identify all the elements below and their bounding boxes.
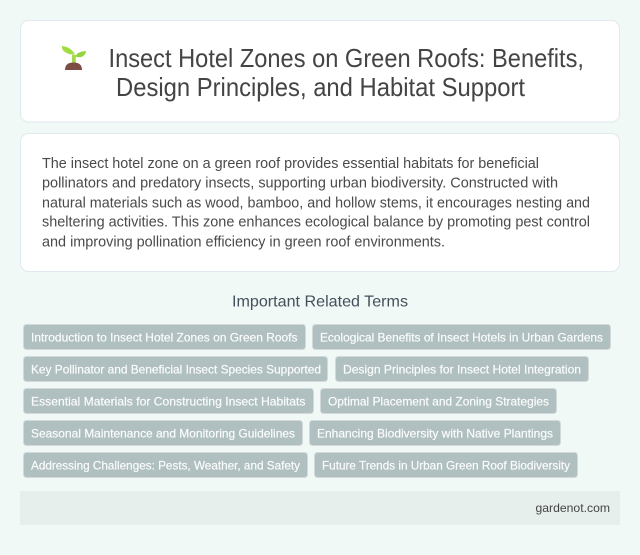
tag: ecological benefits: Ecological Benefits of Insect Hotels in Urban Gardens xyxy=(320,330,603,344)
tag: essential materials xyxy=(24,388,314,414)
title: Insect Hotel Zones on Green Roofs: Benefits, xyxy=(108,45,584,73)
icon: seedling xyxy=(62,46,86,70)
tag: key pollinators: Key Pollinator and Beneficial Insect Species Supported xyxy=(31,362,321,376)
tag: optimal placement: Optimal Placement and Zoning Strategies xyxy=(328,394,549,408)
tag: addressing challenges xyxy=(24,452,308,478)
tag: future trends xyxy=(314,452,578,478)
panel: related term tags xyxy=(24,324,610,478)
description text: and improving pollination efficiency in green roof environments. xyxy=(42,234,445,250)
tag: enhancing biodiversity xyxy=(310,420,560,446)
description text: The insect hotel zone on a green roof provides essential habitats for beneficial xyxy=(42,156,539,172)
tag: future trends: Future Trends in Urban Green Roof Biodiversity xyxy=(322,458,570,472)
tag: optimal placement xyxy=(320,388,556,414)
footer source text: gardenot.com xyxy=(536,501,610,515)
description text: natural materials such as wood, bamboo, and hollow stems, it encourages nesting and xyxy=(42,196,590,212)
description text xyxy=(42,156,590,250)
tag: seasonal maintenance: Seasonal Maintenance and Monitoring Guidelines xyxy=(31,426,295,440)
tag: design principles: Design Principles for Insect Hotel Integration xyxy=(343,362,581,376)
title: Design Principles, and Habitat Support xyxy=(116,74,525,102)
tag: introduction xyxy=(24,324,306,350)
tag: seasonal maintenance xyxy=(24,420,302,446)
tag: addressing challenges: Addressing Challenges: Pests, Weather, and Safety xyxy=(31,458,300,472)
panel: title card xyxy=(20,20,620,122)
panel: description card xyxy=(20,134,620,272)
tag: introduction: Introduction to Insect Hotel Zones on Green Roofs xyxy=(31,330,298,344)
tag: key pollinators xyxy=(24,356,328,382)
description text: sheltering activities. This zone enhances ecological balance by promoting pest control xyxy=(42,214,590,230)
title xyxy=(108,45,584,102)
tag: design principles xyxy=(336,356,588,382)
tag: enhancing biodiversity: Enhancing Biodiversity with Native Plantings xyxy=(317,426,553,440)
tag: ecological benefits xyxy=(312,324,610,350)
tag: essential materials: Essential Materials for Constructing Insect Habitats xyxy=(31,394,306,408)
footer xyxy=(20,491,620,525)
heading: important related terms: Important Related Terms xyxy=(232,294,408,310)
description text: pollinators and predatory insects, supporting urban biodiversity. Constructed with xyxy=(42,176,558,192)
